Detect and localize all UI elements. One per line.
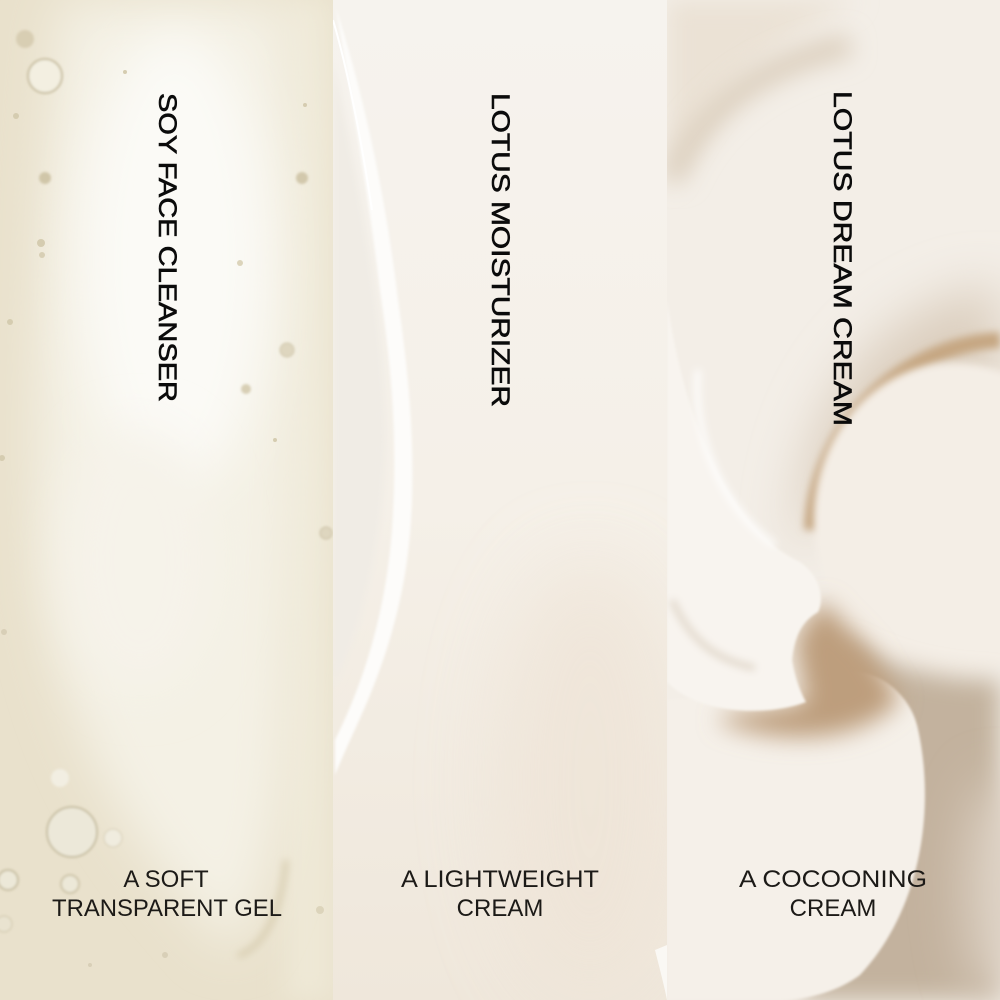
caption: a cocooning cream: A COCOONING — [739, 866, 927, 893]
upper lobe — [688, 520, 822, 712]
caption: a lightweight cream — [401, 866, 599, 922]
caption: a soft transparent gel — [52, 866, 282, 922]
caption: a cocooning cream — [739, 866, 927, 922]
caption: a cocooning cream: CREAM — [790, 895, 876, 922]
lower right shadow — [800, 640, 1000, 1000]
lower cream body — [786, 676, 926, 999]
caption: a lightweight cream: CREAM — [457, 895, 543, 922]
heading: soy face cleanser: SOY FACE CLEANSER — [153, 93, 181, 402]
caption: a lightweight cream: A LIGHTWEIGHT — [401, 866, 599, 893]
swirl shadow — [795, 285, 1000, 560]
icon: gel bubbles — [0, 30, 332, 967]
panel: lotus moisturizer cream texture — [333, 0, 680, 1000]
icon: cream highlight streak — [335, 8, 412, 775]
heading: lotus dream cream: LOTUS DREAM CREAM — [828, 91, 856, 426]
heading: lotus moisturizer: LOTUS MOISTURIZER — [486, 93, 514, 407]
caption: a soft transparent gel: TRANSPARENT GEL — [52, 895, 282, 922]
caption: a soft transparent gel: A SOFT — [123, 866, 209, 893]
inner cream disc — [809, 359, 1000, 538]
panel: lotus dream cream swirl texture — [667, 0, 1000, 1000]
shadow under lobe — [720, 600, 900, 737]
top-left swirl shadow — [667, 0, 828, 140]
panel: soy face cleanser gel texture — [0, 0, 333, 1000]
